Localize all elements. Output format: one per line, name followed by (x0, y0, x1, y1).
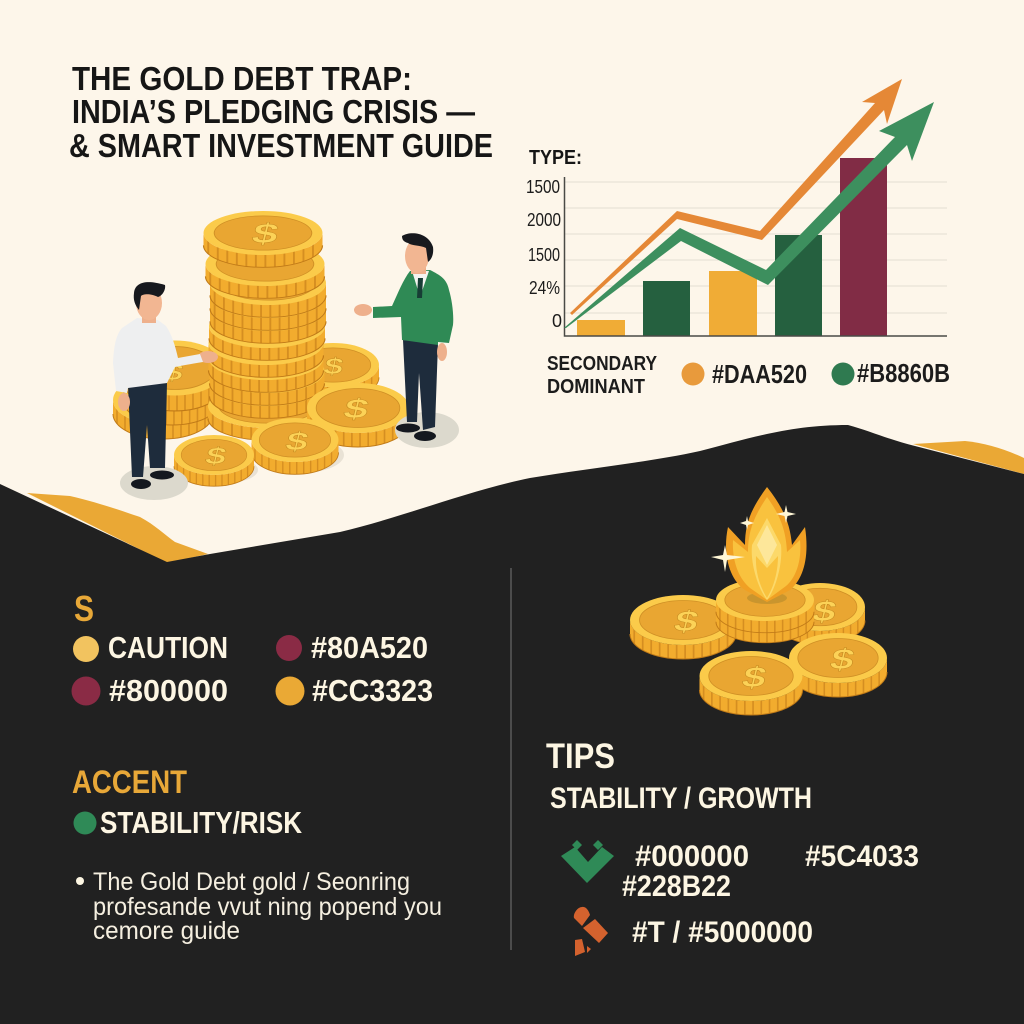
illustration: coin pile with two men (113, 211, 459, 500)
illustration: burning coins (630, 487, 887, 718)
section heading: S: S (74, 588, 94, 629)
chart legend (547, 353, 950, 398)
title (69, 60, 493, 164)
colour list: caution group: #800000 (109, 673, 228, 708)
vertical divider (510, 568, 512, 950)
coins under flame (630, 579, 887, 718)
tips subheading: STABILITY / GROWTH (550, 782, 812, 815)
tip values: colours: #000000 (635, 840, 749, 873)
bars (577, 158, 887, 336)
gold accent: right wave (913, 441, 1024, 474)
title: & SMART INVESTMENT GUIDE (69, 127, 493, 164)
man: white shirt (113, 282, 218, 500)
colour list: caution group: CAUTION (108, 630, 228, 665)
bullet paragraph: The Gold Debt gold / Seonring (93, 868, 410, 896)
coins under flame: $ (827, 643, 858, 675)
title: THE GOLD DEBT TRAP: (72, 60, 412, 97)
bullet paragraph: profesande vvut ning popend you (93, 893, 442, 921)
green arrow (564, 102, 934, 328)
bullet paragraph (76, 868, 442, 945)
icon: orange pencil (574, 907, 608, 956)
title: INDIA’S PLEDGING CRISIS — (72, 93, 475, 130)
coins under flame: $ (809, 595, 840, 627)
y axis labels: 2000 (527, 210, 561, 230)
tip values: colours: #228B22 (622, 870, 731, 903)
chart legend: DOMINANT (547, 376, 645, 398)
coins in front: $ (340, 393, 372, 424)
bar and arrow chart (526, 79, 947, 336)
chart heading: TYPE: (529, 147, 582, 169)
shadows under coins (178, 416, 412, 484)
y axis labels: 24% (529, 278, 560, 298)
y axis labels (526, 177, 562, 331)
gold accent: left wave (27, 493, 208, 563)
coins under flame: $ (671, 605, 702, 637)
y axis labels: 0 (552, 311, 562, 331)
y axis labels: 1500 (526, 177, 560, 197)
chart legend: SECONDARY (547, 353, 658, 375)
coins in front (174, 383, 409, 489)
section heading: accent: ACCENT (72, 764, 187, 800)
dark lower panel (0, 425, 1024, 1024)
tip values: colours (622, 840, 919, 903)
flame (726, 487, 807, 604)
icon: green check (561, 840, 614, 883)
y axis labels: 1500 (528, 245, 560, 265)
sparkles (711, 505, 796, 572)
coins in front: $ (203, 443, 229, 469)
tip value: T / 5000000: #T / #5000000 (632, 916, 813, 949)
coins behind stack (113, 340, 379, 442)
colour list: caution group (72, 630, 433, 708)
tips heading: TIPS (546, 737, 615, 776)
chart legend: #DAA520 (712, 359, 807, 389)
coin stack (204, 211, 328, 443)
man: green jacket (354, 233, 459, 448)
coins behind stack: $ (161, 360, 186, 386)
bullet paragraph: cemore guide (93, 917, 240, 945)
colour list: caution group: #80A520 (311, 630, 428, 665)
tip values: colours: #5C4033 (805, 840, 919, 873)
coins behind stack: $ (321, 354, 346, 380)
axes (564, 177, 947, 336)
coin stack: $ (249, 218, 282, 250)
orange arrow (570, 79, 902, 315)
coins under flame: $ (739, 661, 770, 693)
colour list: caution group: #CC3323 (312, 673, 433, 708)
coins in front: $ (283, 428, 312, 456)
accent item: stability / risk: STABILITY/RISK (100, 805, 303, 840)
chart legend: #B8860B (857, 358, 950, 388)
